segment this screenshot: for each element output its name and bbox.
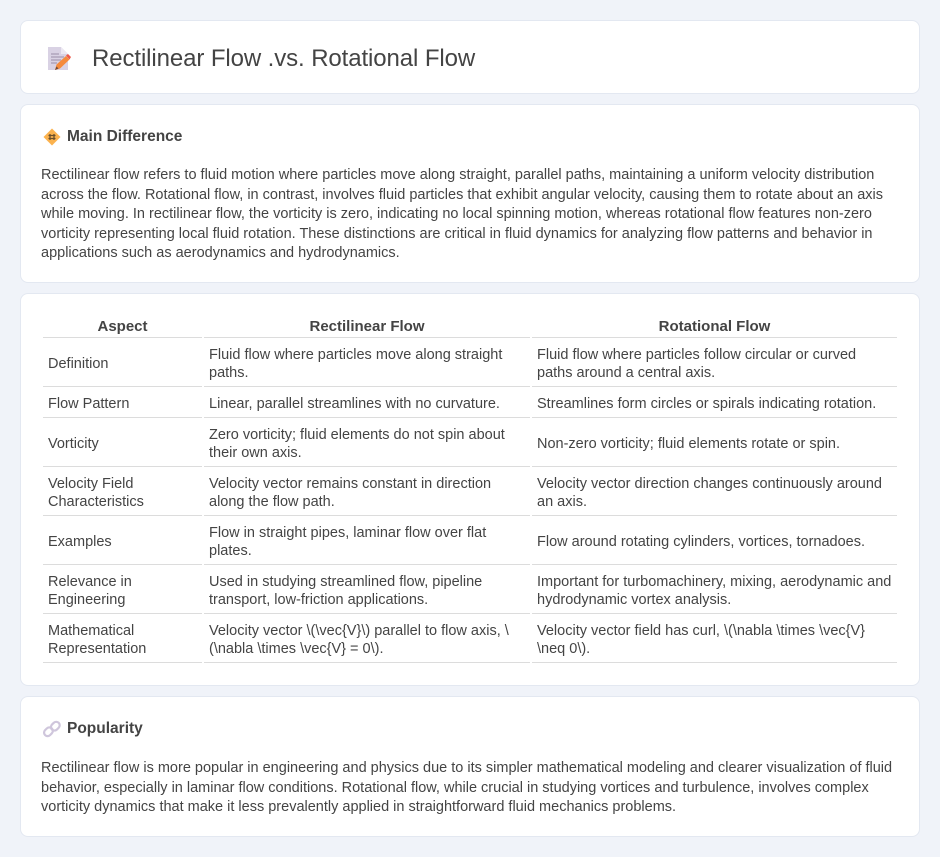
table row: flow pattern: Flow Pattern [48, 396, 129, 412]
table row: mathematical representation: Mathematical [48, 623, 134, 639]
table row: relevance in engineering: Relevance in [48, 574, 132, 590]
text block: popularity [41, 760, 892, 815]
text block: main difference: applications such as aerodynamics and hydrodynamics. [41, 245, 400, 261]
text block: main difference: Rectilinear flow refers to fluid motion where particles move along straight, parallel paths, maintaining a uniform velocity distribution [41, 167, 874, 183]
table row: vorticity [48, 427, 840, 461]
table row: definition: Fluid flow where particles follow circular or curved [537, 347, 856, 363]
table row: vorticity: their own axis. [209, 445, 302, 461]
table header: rotational flow: Rotational Flow [659, 318, 770, 335]
table header: rectilinear flow: Rectilinear Flow [309, 318, 425, 335]
table row: relevance in engineering: hydrodynamic vortex analysis. [537, 592, 731, 608]
text block: main difference [41, 167, 883, 261]
title: Rectilinear Flow .vs. Rotational Flow [92, 45, 475, 72]
table row: mathematical representation: \neq 0\). [537, 641, 590, 657]
panel: comparison table [20, 293, 920, 686]
table row: examples: Examples [48, 534, 112, 550]
table row: mathematical representation: Velocity vector field has curl, \(\nabla \times \vec{V} [537, 623, 865, 639]
table row: flow pattern: Streamlines form circles or spirals indicating rotation. [537, 396, 876, 412]
table header: aspect: Aspect [97, 318, 148, 335]
table row: velocity field characteristics [48, 476, 882, 510]
text block: popularity: behavior, especially in laminar flow conditions. Rotational flow, while crucial in studying vortices and turbulence, involves complex [41, 780, 869, 796]
table row: vorticity: Non-zero vorticity; fluid elements rotate or spin. [537, 436, 840, 452]
table row: examples: Flow in straight pipes, laminar flow over flat [209, 525, 486, 541]
table row: velocity field characteristics: Characteristics [48, 494, 144, 510]
table row: examples: plates. [209, 543, 252, 559]
text block: main difference: while moving. In rectilinear flow, the vorticity is zero, indicating no local spinning motion, whereas rotational flow features non-zero [41, 206, 872, 222]
panel: title card [20, 20, 920, 94]
table row: mathematical representation: Velocity vector \(\vec{V}\) parallel to flow axis, \ [209, 623, 509, 639]
table row: velocity field characteristics: Velocity vector remains constant in direction [209, 476, 491, 492]
table row: relevance in engineering: Important for turbomachinery, mixing, aerodynamic and [537, 574, 891, 590]
table row: examples [48, 525, 865, 559]
icon: warning diamond [44, 128, 60, 146]
text block: main difference: across the flow. Rotational flow, in contrast, involves fluid particles that exhibit angular velocity, causing them to rotate about an axis [41, 186, 883, 202]
icon: memo with pencil [48, 47, 71, 70]
table row: definition: paths. [209, 365, 248, 381]
heading: main difference: Main Difference [67, 128, 182, 145]
panel: popularity [20, 696, 920, 837]
table row: definition: paths around a central axis. [537, 365, 715, 381]
icon: link [43, 720, 61, 738]
table row: velocity field characteristics: Velocity Field [48, 476, 133, 492]
table row: examples: Flow around rotating cylinders, vortices, tornadoes. [537, 534, 865, 550]
panel: main difference [20, 104, 920, 283]
text block: main difference: vorticity representing local fluid rotation. These distinctions are critical in fluid dynamics for analyzing flow patterns and behavior in [41, 226, 872, 242]
table row: flow pattern: Linear, parallel streamlines with no curvature. [209, 396, 500, 412]
table row: velocity field characteristics: an axis. [537, 494, 587, 510]
table row: definition: Definition [48, 356, 108, 372]
text block: popularity: vorticity dynamics that make it less prevalently applied in straightforward fluid mechanics problems. [41, 799, 676, 815]
text block: popularity: Rectilinear flow is more popular in engineering and physics due to its simpler mathematical modeling and clearer visualization of fluid [41, 760, 892, 776]
table row: flow pattern [48, 396, 876, 412]
heading: popularity: Popularity [67, 720, 143, 737]
table row: vorticity: Vorticity [48, 436, 99, 452]
table row: relevance in engineering: Used in studying streamlined flow, pipeline [209, 574, 482, 590]
table row: velocity field characteristics: Velocity vector direction changes continuously around [537, 476, 882, 492]
table row: relevance in engineering [48, 574, 891, 608]
table row: velocity field characteristics: along the flow path. [209, 494, 335, 510]
table row: vorticity: Zero vorticity; fluid elements do not spin about [209, 427, 505, 443]
table row: mathematical representation: (\nabla \times \vec{V} = 0\). [209, 641, 384, 657]
table row: definition [48, 347, 856, 381]
table row: relevance in engineering: Engineering [48, 592, 125, 608]
table row: relevance in engineering: transport, low-friction applications. [209, 592, 428, 608]
table row: mathematical representation [48, 623, 865, 657]
table row: mathematical representation: Representation [48, 641, 146, 657]
table row: definition: Fluid flow where particles move along straight [209, 347, 502, 363]
